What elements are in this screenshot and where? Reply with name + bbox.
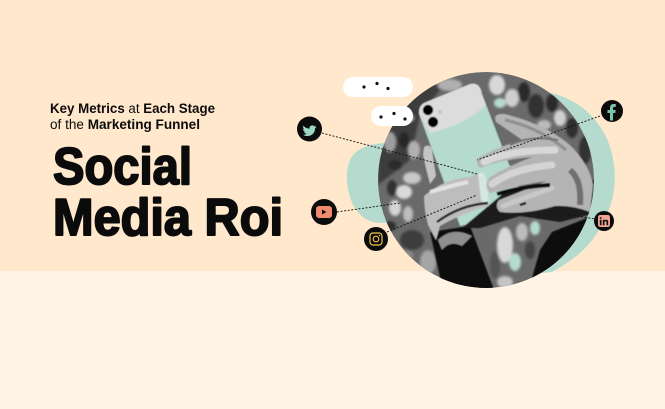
right hand <box>477 114 593 213</box>
subtitle: of the Marketing Funnel <box>50 117 200 132</box>
heading block <box>50 101 283 247</box>
dark area under fingers <box>462 180 594 228</box>
speech bubble large <box>343 77 413 97</box>
icon: linkedin <box>594 211 614 231</box>
bottom background band <box>0 271 665 409</box>
icon: facebook <box>601 100 623 122</box>
phone body <box>418 100 519 227</box>
mint background blob <box>347 91 615 280</box>
top background band <box>0 0 665 271</box>
dark sleeves <box>430 226 494 288</box>
speech bubble small <box>371 106 413 126</box>
subtitle <box>50 101 215 132</box>
left hand <box>423 146 489 250</box>
icon: twitter <box>297 116 322 142</box>
icon: instagram <box>364 227 388 251</box>
title: Social <box>53 138 192 196</box>
icon: youtube <box>311 199 337 225</box>
photo: hands holding a phone <box>378 72 600 300</box>
photo backdrop <box>378 72 594 288</box>
phone top panel <box>419 84 486 133</box>
title <box>53 138 283 247</box>
phone edge <box>482 92 510 165</box>
title: Media Roi <box>53 189 283 247</box>
phone cameras <box>423 105 442 127</box>
subtitle: Key Metrics at Each Stage <box>50 101 215 116</box>
connector lines <box>322 116 600 232</box>
